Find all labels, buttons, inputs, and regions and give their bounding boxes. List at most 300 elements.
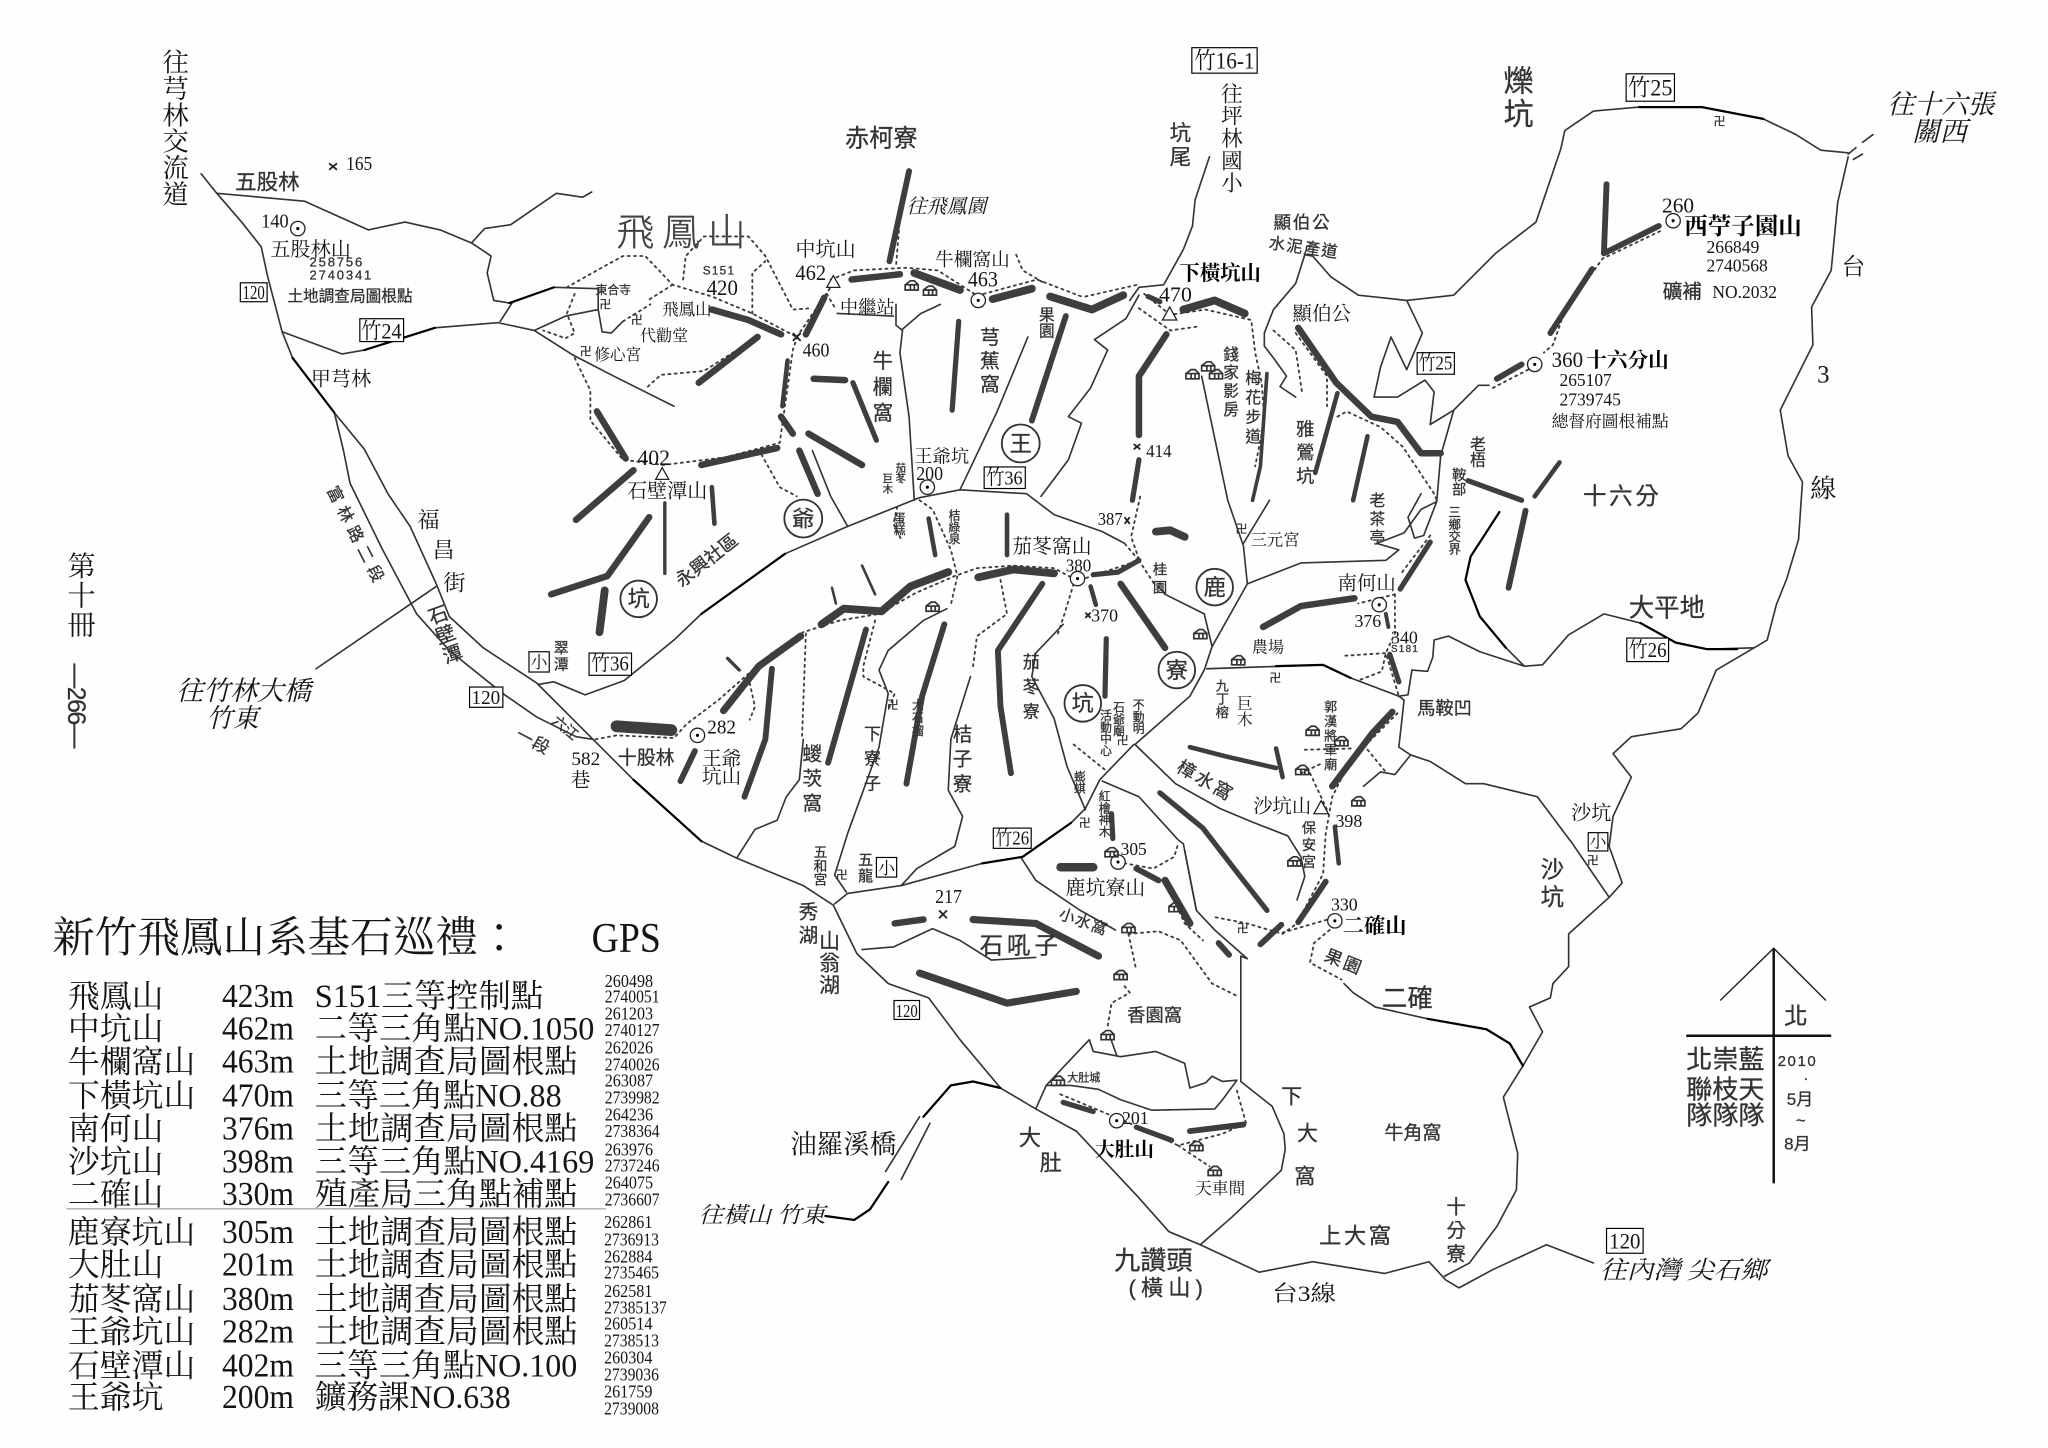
table rows: point types: 三等三角點NO.100 <box>315 1348 577 1385</box>
label: northwest: 往芎林交流道 <box>159 48 189 207</box>
label: central peaks: 370 <box>1091 606 1118 626</box>
hand label: south: 牛角窩 <box>1384 1122 1441 1144</box>
circle: 爺 <box>784 500 822 537</box>
hand label: valleys north: 果園 <box>1036 307 1054 338</box>
road: Zhu 26 east <box>1524 614 1754 666</box>
survey dates: ~ <box>1796 1111 1806 1130</box>
road: Zhu 24 <box>217 193 598 354</box>
label: Xiahengkeng area: 農場 <box>1252 638 1284 656</box>
GPS heading: GPS <box>592 916 661 962</box>
hand label: northwest: 五股林 <box>235 169 300 194</box>
table rows: GPS coordinates: 2738364 <box>605 1121 660 1141</box>
label: Xizhuziyuan and Shiliufen peaks: 265107 <box>1560 370 1612 390</box>
table rows: heights: 282m <box>222 1314 294 1351</box>
ridgelines <box>551 171 1659 1140</box>
road: Yuluo bridge approach <box>825 1081 1000 1220</box>
circle: 鹿: 鹿 <box>1204 575 1226 600</box>
table rows: GPS coordinates: 264236 <box>605 1105 653 1125</box>
table rows: heights: 380m <box>222 1281 294 1318</box>
table rows: heights: 463m <box>222 1043 294 1080</box>
road: Lu valley <box>1135 745 1305 900</box>
label: Xizhuziyuan and Shiliufen peaks: 2740568 <box>1706 256 1768 276</box>
volume and page number <box>62 551 96 749</box>
road: Niulan valley <box>837 304 1028 500</box>
hand label: north: 赤柯寮 <box>845 125 918 152</box>
box: 小 west: 小 <box>531 653 549 672</box>
circle: 坑 west: 坑 <box>628 587 650 612</box>
circle: 鹿 <box>1196 569 1233 605</box>
temples: 卍 <box>580 345 592 358</box>
box: 120 east: 120 <box>1609 1229 1640 1254</box>
table rows: GPS coordinates: 2740051 <box>605 986 660 1006</box>
spot height crosses <box>329 163 1140 918</box>
label: northwest <box>159 48 372 390</box>
table rows: GPS coordinates: 260514 <box>604 1314 653 1334</box>
table rows: heights: 376m <box>222 1111 294 1148</box>
temples: 卍 <box>631 314 643 327</box>
box: 竹25 middle: 竹25 <box>1418 353 1453 375</box>
table rows: heights: 201m <box>222 1246 294 1283</box>
temples: 卍 <box>1237 923 1249 936</box>
trail: Shibitan ridge <box>575 337 797 496</box>
label: Xiahengkeng area: 下橫坑山 <box>1179 262 1261 285</box>
road: southern valleys <box>737 451 1085 892</box>
label: Taiwan route 3: 台 <box>1842 253 1865 280</box>
label: south: 大肚山 <box>1095 1139 1154 1161</box>
table rows: heights: 470m <box>222 1077 294 1114</box>
table rows: GPS coordinates: 262861 <box>604 1212 652 1232</box>
team credit: 北崇藍 <box>1686 1044 1765 1074</box>
team credit: 隊隊隊 <box>1686 1101 1765 1131</box>
box: 小 Sakeng: 小 <box>1590 833 1608 852</box>
hand label: valleys north: 鞍部 <box>1450 467 1466 497</box>
circle: 王 <box>1002 425 1040 462</box>
label: eastern peaks: 376 <box>1354 611 1381 631</box>
hand label: east <box>1151 561 1564 1013</box>
hand label: east: 郭漢將軍廟 <box>1322 700 1337 772</box>
road: to Zhulin bridge <box>316 586 436 669</box>
ridges: central north <box>600 171 1441 632</box>
table rows: GPS coordinates: 2740127 <box>605 1020 660 1040</box>
hand label: Shibitan road names: 富林路二段 <box>323 483 389 590</box>
hand label: central west: 巨木 <box>881 473 893 494</box>
table rows: GPS coordinates: 263976 <box>605 1139 653 1159</box>
hand label: central west: 桔綠泉 <box>947 509 960 545</box>
circle: 坑 central: 坑 <box>1072 691 1094 716</box>
table rows: summit names: 南何山 <box>68 1112 164 1147</box>
label: southwest <box>176 508 741 791</box>
hand label: central west: 五龍 <box>856 852 873 884</box>
trail: Zhongkeng to Xiahengkeng <box>827 218 1437 500</box>
table rows: heights: 305m <box>222 1214 294 1251</box>
hand label: valleys north: 老梧 <box>1467 436 1485 468</box>
hand label: east: 沙坑 <box>1537 857 1564 912</box>
table rows: point types: 土地調查局圖根點 <box>315 1246 577 1283</box>
hand label: valleys north: 錢家影房 <box>1221 346 1238 419</box>
temples: 卍 <box>1079 817 1091 830</box>
label: Zhongkeng area: 463 <box>968 267 998 292</box>
box: 竹16-1: 竹16-1 <box>1194 48 1255 75</box>
hand label: valleys north: 梅花步道 <box>1243 369 1261 448</box>
road: Zhu 26 <box>835 745 1196 930</box>
hand label: central west: 大石榴 <box>910 698 923 738</box>
label: southwest: 福 <box>417 508 440 533</box>
table rows: GPS coordinates <box>604 971 667 1419</box>
summit table <box>52 915 667 1419</box>
hand label: Shibitan road names: 六江 <box>549 712 582 744</box>
table rows: GPS coordinates: 262884 <box>604 1246 653 1266</box>
table rows: summit names: 石壁潭山 <box>68 1349 195 1384</box>
hand label: south: 肚 <box>1040 1150 1062 1175</box>
table rows: point types: 鑛務課NO.638 <box>315 1379 511 1416</box>
trail: Dadu ridge <box>1058 1091 1246 1166</box>
hand label: central west: 下寮子 <box>861 725 881 799</box>
label: northwest: 140 <box>261 211 289 232</box>
table rows: summit names: 牛欄窩山 <box>68 1044 195 1079</box>
circle: 寮: 寮 <box>1166 658 1188 683</box>
road: Xiada <box>1185 850 1285 1245</box>
label: eastern peaks: 二確山 <box>1343 914 1406 938</box>
survey dates: . <box>1804 1067 1808 1084</box>
road: route 120 trunk <box>201 174 1593 1288</box>
hand label: south: 九讚頭 <box>1114 1246 1192 1276</box>
printed map labels <box>159 48 1998 1306</box>
label: south: 往橫山 竹東 <box>699 1203 829 1228</box>
hand label: south: 香園窩 <box>1127 1004 1182 1025</box>
hand label: central west: 活動中心 <box>1098 709 1111 756</box>
label: south: 往內灣 尖石鄉 <box>1600 1258 1772 1285</box>
label: eastern peaks: 沙坑 <box>1571 802 1611 825</box>
temples: 卍 <box>1270 672 1281 685</box>
box: 120 Shibitan: 120 <box>472 688 500 709</box>
hand label: northwest: 2740341 <box>310 268 373 283</box>
table rows: GPS coordinates: 27385137 <box>604 1297 667 1317</box>
hand label: south: 大肚城 <box>1067 1070 1100 1084</box>
table rows: GPS coordinates: 2739008 <box>604 1399 659 1419</box>
hand label: northwest: 258756 <box>310 254 364 269</box>
hand label: valleys north: 牛欄窩 <box>869 350 892 428</box>
table rows: point types: 二等三角點NO.1050 <box>315 1011 594 1048</box>
label: Xizhuziyuan and Shiliufen peaks: 總督府圖根補點 <box>1552 411 1669 431</box>
hand label: north <box>845 65 1702 303</box>
box: 竹26 south: 竹26 <box>995 827 1029 849</box>
temples: 卍 <box>836 869 848 882</box>
label: Xizhuziyuan and Shiliufen peaks: 十六分山 <box>1586 349 1669 372</box>
label: Xiahengkeng area: 414 <box>1146 441 1172 461</box>
road: Shihouzi <box>862 929 1036 960</box>
hand label: central west: 十股林 <box>618 747 675 769</box>
hand label: east: S181 <box>1391 644 1419 655</box>
temples: 卍 <box>600 298 611 311</box>
temples: 卍 <box>1117 735 1128 748</box>
hand label: central west: 蝬茨窩 <box>799 743 822 818</box>
label: Xizhuziyuan and Shiliufen peaks: 260 <box>1662 193 1694 217</box>
table rows: GPS coordinates: 264075 <box>605 1173 653 1193</box>
temples <box>580 115 1725 936</box>
table rows: point types: 土地調查局圖根點 <box>315 1111 577 1148</box>
table rows: point types <box>315 978 594 1416</box>
hand label: central west: 不動明 <box>1131 699 1144 735</box>
label: Feifeng area: 石壁潭山 <box>627 480 707 503</box>
hand label: valleys north: 大平地 <box>1629 595 1705 623</box>
hand label: central west: 茄苳寮 <box>1020 653 1039 727</box>
label: Feifeng area <box>594 275 830 503</box>
hand label: central west <box>552 462 1144 997</box>
label: central peaks: 217 <box>935 887 962 908</box>
label: Feifeng area: 修心宮 <box>594 346 641 364</box>
road: Maan <box>1399 512 1524 696</box>
table rows: heights: 330m <box>222 1176 294 1213</box>
table rows: GPS coordinates: 2735465 <box>604 1263 659 1283</box>
label: central peaks <box>935 509 1147 908</box>
hand label: northwest <box>235 169 754 306</box>
temples: 卍 <box>1714 115 1725 128</box>
box: 小 Wulong: 小 <box>878 859 896 878</box>
hand label: south: (橫山) <box>1128 1276 1203 1301</box>
hand label: central west: 蟛蜞 <box>1072 771 1085 795</box>
table rows: summit names: 王爺坑 <box>68 1380 164 1415</box>
table rows: GPS coordinates: 261759 <box>604 1382 653 1402</box>
ridges: east <box>1105 184 1659 955</box>
table rows: summit names: 飛鳳山 <box>68 979 164 1014</box>
hand label: east: 馬鞍凹 <box>1417 697 1472 718</box>
hand label: northwest: 東合寺 <box>596 283 631 297</box>
handwritten map labels <box>235 65 1705 1301</box>
table rows: point types: S151三等控制點 <box>315 978 543 1015</box>
trail: sixteen-fen ridge <box>1400 231 1660 575</box>
label: Xiahengkeng area: 往坪林國小 <box>1218 82 1242 194</box>
label: Xiahengkeng area <box>1146 82 1351 727</box>
survey dates <box>1778 1053 1817 1153</box>
label: northwest: 五股林山 <box>270 238 351 261</box>
circle: 坑 west <box>620 581 657 617</box>
label: Xiahengkeng area: 470 <box>1159 283 1192 307</box>
label: Zhongkeng area: 往飛鳳園 <box>906 196 989 218</box>
benchmark circles <box>291 214 1680 1128</box>
hand label: east: 果園 <box>1322 945 1367 979</box>
label: Feifeng area: 飛鳳山 <box>662 300 712 319</box>
label: Feifeng area: 402 <box>637 445 670 470</box>
hand label: east: 九丁榕 <box>1214 679 1229 719</box>
label: central peaks: 鹿坑寮山 <box>1066 878 1145 900</box>
circle: 爺: 爺 <box>792 506 814 531</box>
table rows: summit names: 沙坑山 <box>68 1144 164 1179</box>
circle: 坑 central <box>1064 685 1101 722</box>
table rows: summit names: 王爺坑山 <box>68 1315 195 1350</box>
hand label: east: 桂園 <box>1151 561 1167 598</box>
road: Fulin road <box>334 413 593 739</box>
label: central peaks: 380 <box>1066 555 1091 575</box>
hand label: central west: 小水窩 <box>1057 904 1111 939</box>
table rows: GPS coordinates: 263087 <box>605 1071 653 1091</box>
road network <box>201 107 1873 1288</box>
hand label: south: 十分寮 <box>1443 1196 1466 1267</box>
hand label: northwest: 土地調查局圖根點 <box>287 288 413 306</box>
label: eastern peaks <box>1253 573 1611 938</box>
hand label: valleys north: 雅鶯坑 <box>1294 419 1315 490</box>
table rows: GPS coordinates: 2738513 <box>604 1331 659 1351</box>
label: southwest: 街 <box>443 570 466 595</box>
label: Zhongkeng area: 中坑山 <box>795 238 856 261</box>
hand label: central west: 永興社區 <box>671 529 742 591</box>
label: south <box>699 1108 1772 1306</box>
road: trunk to Sanyuan <box>1135 376 1489 745</box>
label: Zhongkeng area: 462 <box>795 260 826 285</box>
label: Xiahengkeng area: 顯伯公 <box>1292 303 1351 325</box>
table rows: heights: 398m <box>222 1143 294 1180</box>
road: Zhu 36 <box>538 490 1125 695</box>
label: Xiahengkeng area: 三元宮 <box>1251 530 1300 549</box>
temples: 卍 <box>1587 855 1599 868</box>
box: 竹26 east: 竹26 <box>1629 638 1667 662</box>
hand label: valleys north: 三鄉交界 <box>1447 505 1461 556</box>
temples: 卍 <box>887 699 899 712</box>
label: south: 油羅溪橋 <box>790 1129 896 1159</box>
label: Xizhuziyuan and Shiliufen peaks <box>1552 193 1802 431</box>
north character: 北 <box>1784 1003 1808 1029</box>
table rows: summit names: 下橫坑山 <box>68 1078 195 1113</box>
hand label: central west: 桔子寮 <box>949 724 972 798</box>
label: eastern peaks: 340 <box>1391 627 1418 647</box>
table rows: summit names <box>68 979 195 1415</box>
label: Feifeng area: 420 <box>707 275 738 300</box>
table title: 新竹飛鳳山系基石巡禮： <box>52 915 520 962</box>
hand label: south <box>1019 1004 1466 1301</box>
label: Xizhuziyuan and Shiliufen peaks: 2739745 <box>1560 390 1621 410</box>
hand label: north: 水泥產道 <box>1268 234 1340 262</box>
table rows: GPS coordinates: 262581 <box>604 1281 652 1301</box>
circle: 王: 王 <box>1010 431 1032 456</box>
label: southwest: 582 <box>571 749 600 770</box>
label: Taiwan route 3 <box>1810 90 1998 504</box>
volume and page number: 第十冊 <box>64 551 96 639</box>
table rows: point types: 土地調查局圖根點 <box>315 1214 577 1251</box>
road: Kengwei <box>1130 157 1209 300</box>
table rows: GPS coordinates: 2736607 <box>605 1190 660 1210</box>
road: darker inked segments <box>293 107 1763 1066</box>
road: orchard winding road <box>1041 295 1139 496</box>
table rows: GPS coordinates: 260498 <box>605 971 653 991</box>
label: south: 台3線 <box>1272 1281 1336 1306</box>
label: Xiahengkeng area: 巨木 <box>1234 695 1252 727</box>
label: central peaks: 茄苳窩山 <box>1012 536 1092 558</box>
label: southwest: 坑山 <box>702 766 741 788</box>
label: Taiwan route 3: 線 <box>1810 475 1836 504</box>
label: southwest: 竹東 <box>206 704 262 733</box>
label: Xizhuziyuan and Shiliufen peaks: 360 <box>1552 347 1583 372</box>
hand label: east: 二確 <box>1382 985 1433 1013</box>
road: Erque <box>1344 984 1523 1066</box>
hand label: north: 爍坑 <box>1499 65 1533 131</box>
road: Zhu 25 S curve <box>1374 300 1454 538</box>
table rows: point types: 殖產局三角點補點 <box>315 1176 577 1213</box>
north arrow <box>1686 948 1831 1183</box>
table rows: heights: 402m <box>222 1348 294 1385</box>
volume and page number: —266— <box>62 664 89 749</box>
summit and place markers <box>291 115 1725 1176</box>
label: southwest: 巷 <box>571 769 591 791</box>
box: 竹24: 竹24 <box>361 318 402 343</box>
hand label: north: 顯伯公 <box>1273 213 1331 233</box>
road: Sakeng <box>1207 665 1609 897</box>
circled region characters <box>620 425 1233 722</box>
label: Zhongkeng area <box>795 196 1010 485</box>
trail: Wangye ridge <box>596 496 1156 772</box>
hand label: central west: 翠潭 <box>552 640 569 673</box>
table rows: GPS coordinates: 2736913 <box>604 1229 659 1249</box>
table rows: summit names: 大肚山 <box>68 1247 164 1282</box>
table rows: point types: 土地調查局圖根點 <box>315 1281 577 1318</box>
hand label: south: 窩 <box>1294 1165 1315 1188</box>
hand label: central west: 蛋糕 <box>892 512 905 536</box>
road: Dadu interior <box>1036 1040 1237 1110</box>
team credit: 聯枝天 <box>1686 1074 1765 1104</box>
label: eastern peaks: 398 <box>1336 811 1362 831</box>
table rows: heights <box>222 978 294 1416</box>
survey dates: 8月 <box>1784 1134 1811 1153</box>
label: Taiwan route 3: 3 <box>1817 362 1830 389</box>
label: Taiwan route 3: 關西 <box>1912 117 1972 147</box>
table rows: heights: 200m <box>222 1379 294 1416</box>
table rows: point types: 三等三角點NO.4169 <box>315 1143 594 1180</box>
hand label: north: 坑尾 <box>1167 121 1192 170</box>
box: 竹25 top: 竹25 <box>1628 74 1672 101</box>
hand label: central west: 石吼子 <box>980 932 1062 958</box>
hand label: Shibitan road names <box>323 483 582 759</box>
label: Zhongkeng area: 王爺坑 <box>914 446 969 466</box>
table rows: GPS coordinates: 2740026 <box>605 1054 660 1074</box>
box: 竹36 centre: 竹36 <box>986 467 1023 490</box>
ridges: central south <box>616 560 1243 1140</box>
table rows: GPS coordinates: 2739036 <box>604 1365 659 1385</box>
table rows: GPS coordinates: 262026 <box>605 1037 653 1057</box>
label: northwest: 甲芎林 <box>311 367 371 390</box>
label: southwest: 王爺 <box>702 748 741 770</box>
ridges: west <box>551 298 824 594</box>
team credit <box>1686 1044 1817 1153</box>
table rows: point types: 土地調查局圖根點 <box>315 1314 577 1351</box>
label: Xizhuziyuan and Shiliufen peaks: NO.2032 <box>1712 282 1777 302</box>
hand label: south: 大 <box>1019 1125 1041 1150</box>
road: Taiwan 3 crossing mark <box>1848 135 1873 159</box>
hand label: east: 樟水窩 <box>1174 756 1238 805</box>
survey dates: 5月 <box>1787 1090 1813 1109</box>
label: Zhongkeng area: 中繼站 <box>840 297 895 317</box>
label: Feifeng area: 460 <box>803 341 830 362</box>
box: 120 south: 120 <box>896 1001 918 1021</box>
label: southwest: 282 <box>707 717 736 738</box>
label: south: 天車間 <box>1195 1179 1245 1198</box>
table rows: GPS coordinates: 260304 <box>604 1348 653 1368</box>
label: southwest: 往竹林大橋 <box>176 676 315 706</box>
hand label: east: 保安宮 <box>1299 820 1316 871</box>
label: central peaks: 387 <box>1098 509 1123 529</box>
hand label: northwest: S151 <box>703 264 735 277</box>
label: Zhongkeng area: 牛欄窩山 <box>935 250 1010 271</box>
table rows: GPS coordinates: 2737246 <box>605 1156 660 1176</box>
road: Zhu 25 upper and Taiwan 3 <box>1264 107 1848 397</box>
hand label: central west: 五和宮 <box>811 845 827 887</box>
hand label: northwest: 飛鳳山 <box>616 213 754 255</box>
label: eastern peaks: 沙坑山 <box>1253 795 1311 817</box>
triangulation triangles <box>656 276 1328 814</box>
hand label: south: 上大窩 <box>1319 1223 1394 1248</box>
label: Zhongkeng area: 200 <box>916 464 943 485</box>
road: branches near Feifeng <box>472 192 674 406</box>
table rows: summit names: 茄苳窩山 <box>68 1282 195 1317</box>
hand label: valleys north <box>869 307 1705 623</box>
table rows: GPS coordinates: 261203 <box>605 1003 653 1023</box>
